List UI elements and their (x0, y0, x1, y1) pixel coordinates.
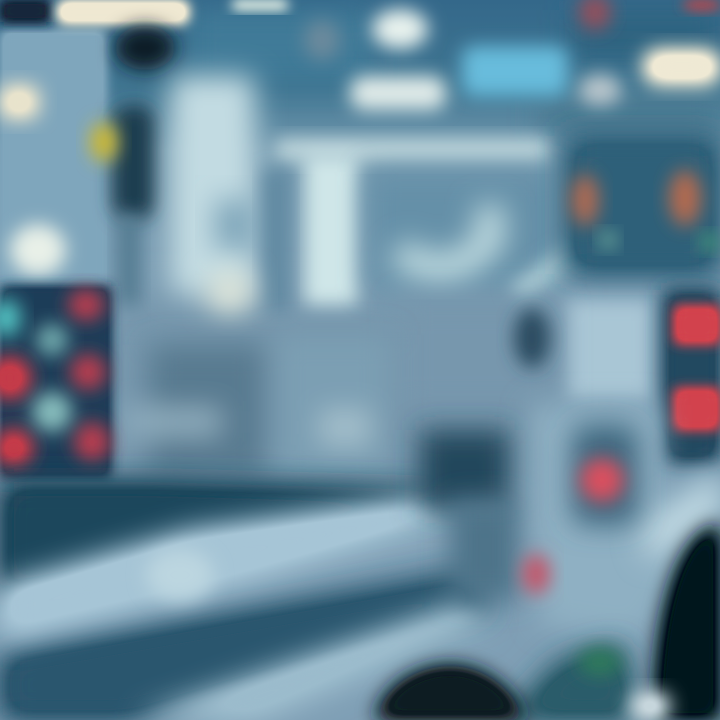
right console (400, 290, 720, 462)
right dark wall with indicators (566, 136, 720, 274)
left display with diamonds (0, 286, 111, 478)
top lights (0, 0, 720, 118)
light desk surface (0, 496, 455, 638)
right lower machine (420, 405, 720, 640)
bottom foreground silhouettes (375, 525, 720, 720)
top dark band (190, 10, 720, 130)
left wall panel (0, 0, 106, 288)
lower light strip (135, 602, 490, 720)
middle window (368, 172, 600, 295)
pale columns and beam (10, 75, 550, 314)
dark desk shadow (0, 482, 490, 720)
lower grey cabinets (125, 335, 390, 485)
standing figure (90, 26, 175, 305)
